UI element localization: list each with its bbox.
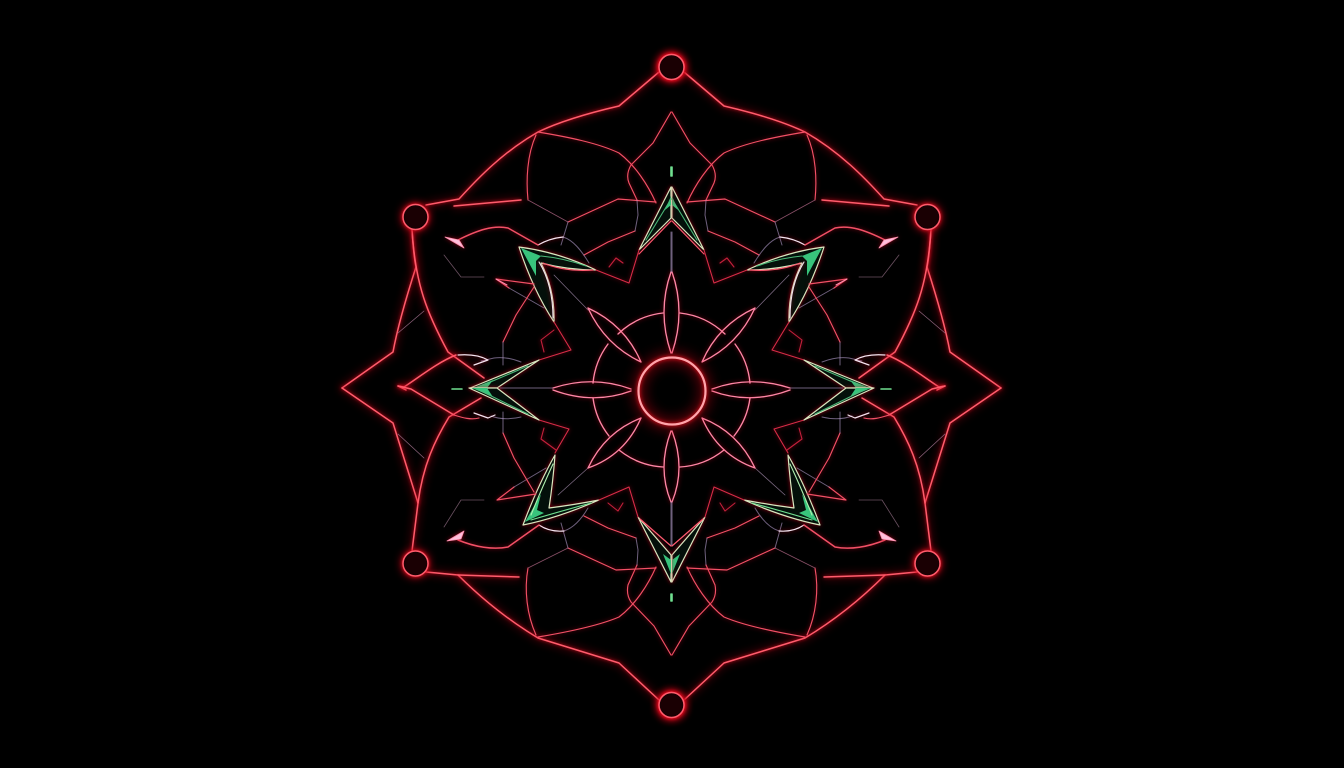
top left quadrant (mirror): [342, 54, 684, 390]
diagonal petal: lower: [702, 418, 755, 468]
bottom dart: green chevron: [672, 517, 705, 601]
outer frame: bottom right: [684, 386, 1001, 700]
node: bottom: [659, 692, 684, 718]
vertical petal: upper: [672, 232, 679, 353]
top dart: green chevron: [672, 167, 704, 254]
star lines: [704, 250, 804, 360]
small dart and connector: [799, 279, 885, 365]
bottom spire and petal-shaped cells: [672, 508, 817, 655]
small dart and connector lower: [797, 412, 889, 500]
thin grey lines: [755, 255, 945, 333]
star lines lower: [705, 420, 804, 517]
node: lower right: [915, 551, 940, 576]
side dart: lower half: [804, 388, 874, 420]
horizontal petal: upper: [712, 382, 843, 389]
diagonal dart: green chevron lower: [744, 455, 820, 525]
diagonal dart: green chevron: [747, 247, 824, 322]
top spire and petal-shaped cells: [672, 112, 816, 263]
node: upper right: [915, 204, 940, 230]
top right quadrant: [659, 54, 1001, 390]
bottom right quadrant: [659, 386, 1001, 718]
arrow: lower right: [804, 525, 896, 548]
outer frame: top right: [684, 72, 1001, 390]
arrow: upper right: [805, 227, 898, 248]
bottom left quadrant (mirror): [342, 386, 684, 718]
side dart: upper half: [804, 360, 891, 389]
central circle: [638, 358, 706, 424]
vertical petal: lower: [672, 431, 679, 545]
diagonal petal: upper: [702, 308, 755, 362]
ring arcs: upper: [680, 313, 750, 383]
ring arcs: lower: [680, 398, 750, 467]
node: top: [659, 54, 684, 80]
thin grey lines lower: [755, 434, 945, 527]
horizontal petal: lower: [712, 390, 790, 398]
